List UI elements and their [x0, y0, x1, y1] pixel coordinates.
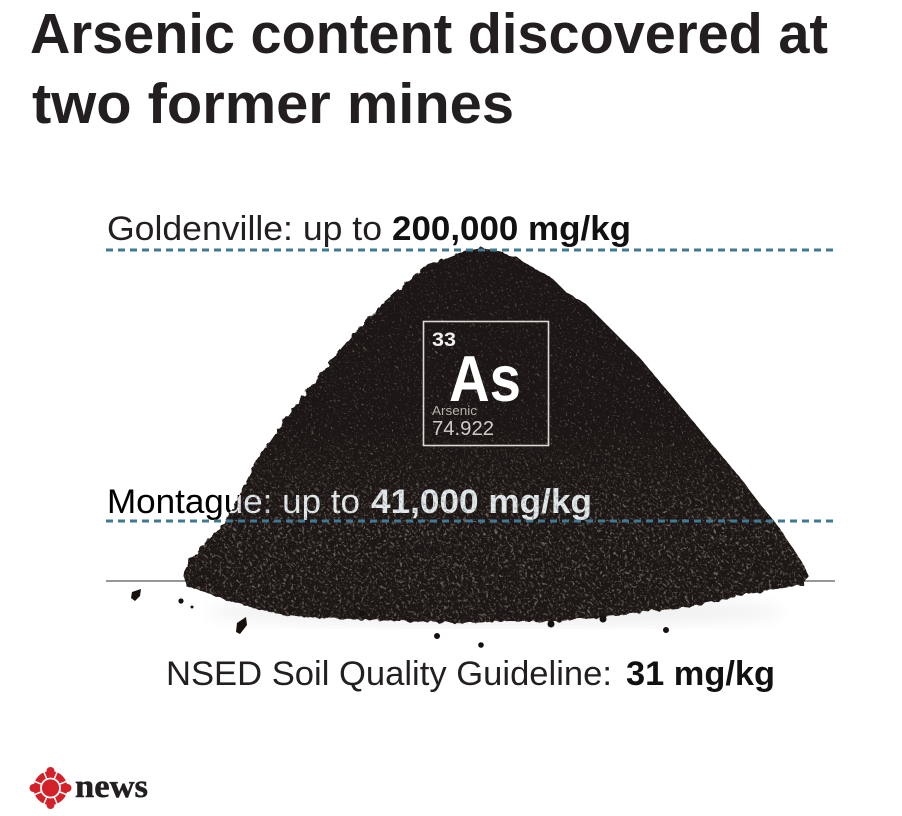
Goldenville label [107, 210, 631, 248]
Montague label: 41,000 mg/kg [371, 483, 592, 521]
periodic table tile: arsenic: 74.922 [432, 418, 494, 440]
Goldenville label: 200,000 mg/kg [392, 210, 631, 248]
CBC news logo [30, 767, 148, 809]
NSED guideline label: 31 mg/kg [626, 655, 775, 693]
Goldenville dashed level line [106, 248, 835, 252]
title: two former mines [32, 72, 514, 136]
Montague label: Montague: up to [107, 483, 360, 521]
icon: CBC gem [30, 767, 72, 809]
title [30, 2, 828, 136]
periodic table tile: arsenic: As [449, 342, 521, 415]
periodic table tile: arsenic [424, 322, 548, 446]
soil pile [131, 240, 820, 648]
periodic table tile: arsenic: Arsenic [432, 403, 478, 418]
guideline baseline [106, 580, 835, 582]
NSED guideline label: NSED Soil Quality Guideline: [166, 655, 612, 693]
wordmark: news [75, 769, 148, 805]
title: Arsenic content discovered at [30, 2, 828, 66]
Goldenville label: Goldenville: up to [107, 210, 382, 248]
periodic table tile: arsenic: 33 [432, 330, 456, 351]
Montague dashed level line [106, 520, 835, 522]
scattered soil crumbs [131, 589, 669, 648]
Montague label [107, 483, 592, 521]
